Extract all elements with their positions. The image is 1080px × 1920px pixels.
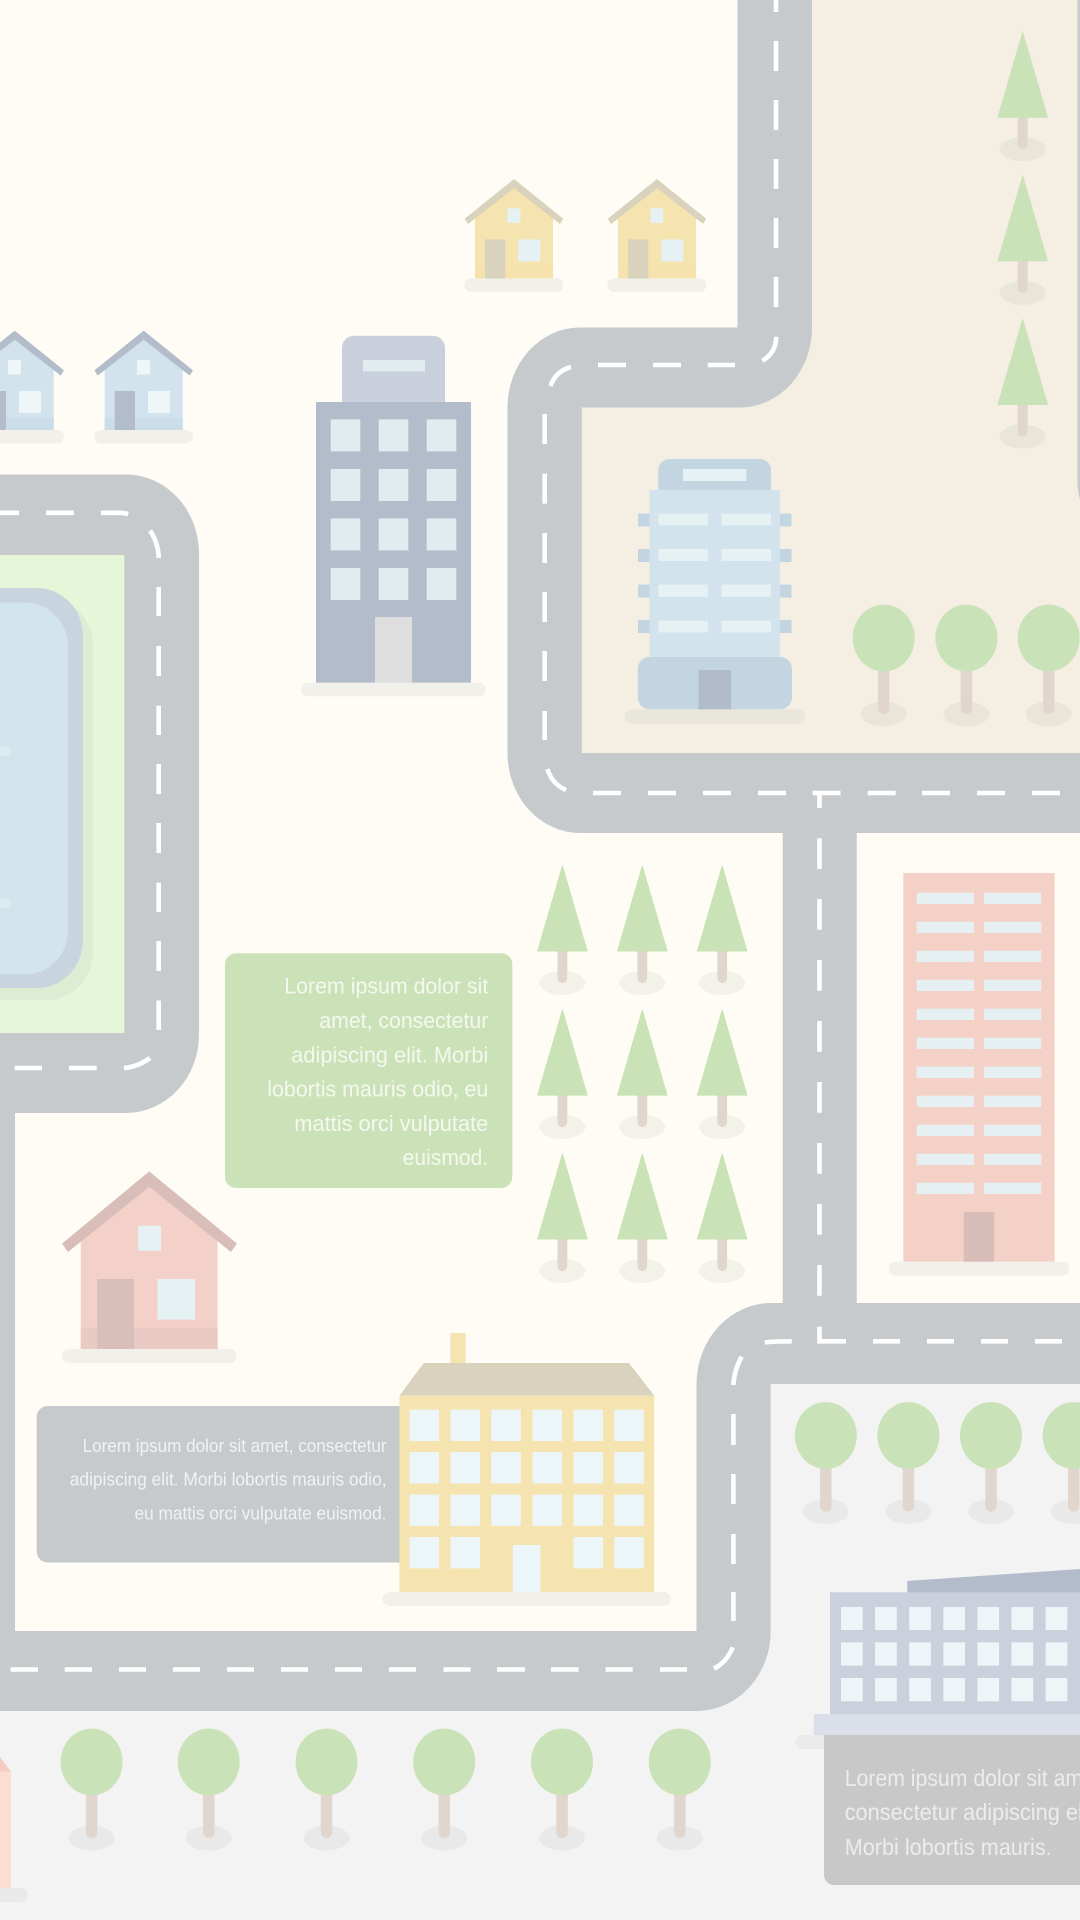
- building: yellow apartment block: [382, 1333, 671, 1606]
- building: grey office: [301, 336, 486, 696]
- round trees: beige row: [853, 605, 1080, 726]
- road: ring around park: [0, 474, 199, 1631]
- callout: green text box: mattis orci vulputate: [294, 1111, 488, 1136]
- pine trees: central grid: [537, 864, 748, 1283]
- pine trees: beige column: [997, 31, 1048, 448]
- callout: bottom-right text box: [824, 1735, 1080, 1885]
- callout: grey text box: eu mattis orci vulputate euismod.: [134, 1503, 386, 1524]
- callout: green text box: Lorem ipsum dolor sit: [284, 973, 489, 998]
- round trees: right row: [795, 1402, 1080, 1524]
- callout: grey text box: Lorem ipsum dolor sit amet, consectetur: [83, 1435, 387, 1456]
- houses: yellow pair: [464, 179, 706, 292]
- callout: bottom-right text box: Morbi lobortis mauris.: [845, 1834, 1052, 1860]
- callout: green text box: adipiscing elit. Morbi: [291, 1042, 488, 1067]
- panel: edge of card at right: [1077, 0, 1080, 500]
- house: pink sliver at left edge: [0, 1757, 28, 1902]
- callout: green text box: lobortis mauris odio, eu: [267, 1077, 488, 1102]
- building: wide blue-grey block: [796, 1569, 1080, 1749]
- callout: green text box: amet, consectetur: [319, 1008, 489, 1033]
- park: grass and lake: [0, 555, 124, 1033]
- round trees: bottom row: [61, 1729, 711, 1850]
- callout: green text box: euismod.: [403, 1145, 488, 1170]
- panel: grey district: [0, 1370, 1080, 1920]
- building: red tower: [889, 873, 1069, 1276]
- houses: blue pair: [0, 331, 193, 444]
- callout: green text box: [225, 953, 512, 1188]
- panel: beige district: [570, 0, 1080, 753]
- callout: grey text box: [37, 1406, 417, 1562]
- house: red: [62, 1171, 237, 1363]
- callout: grey text box: adipiscing elit. Morbi lobortis mauris odio,: [70, 1469, 387, 1490]
- building: blue tower: [625, 459, 805, 724]
